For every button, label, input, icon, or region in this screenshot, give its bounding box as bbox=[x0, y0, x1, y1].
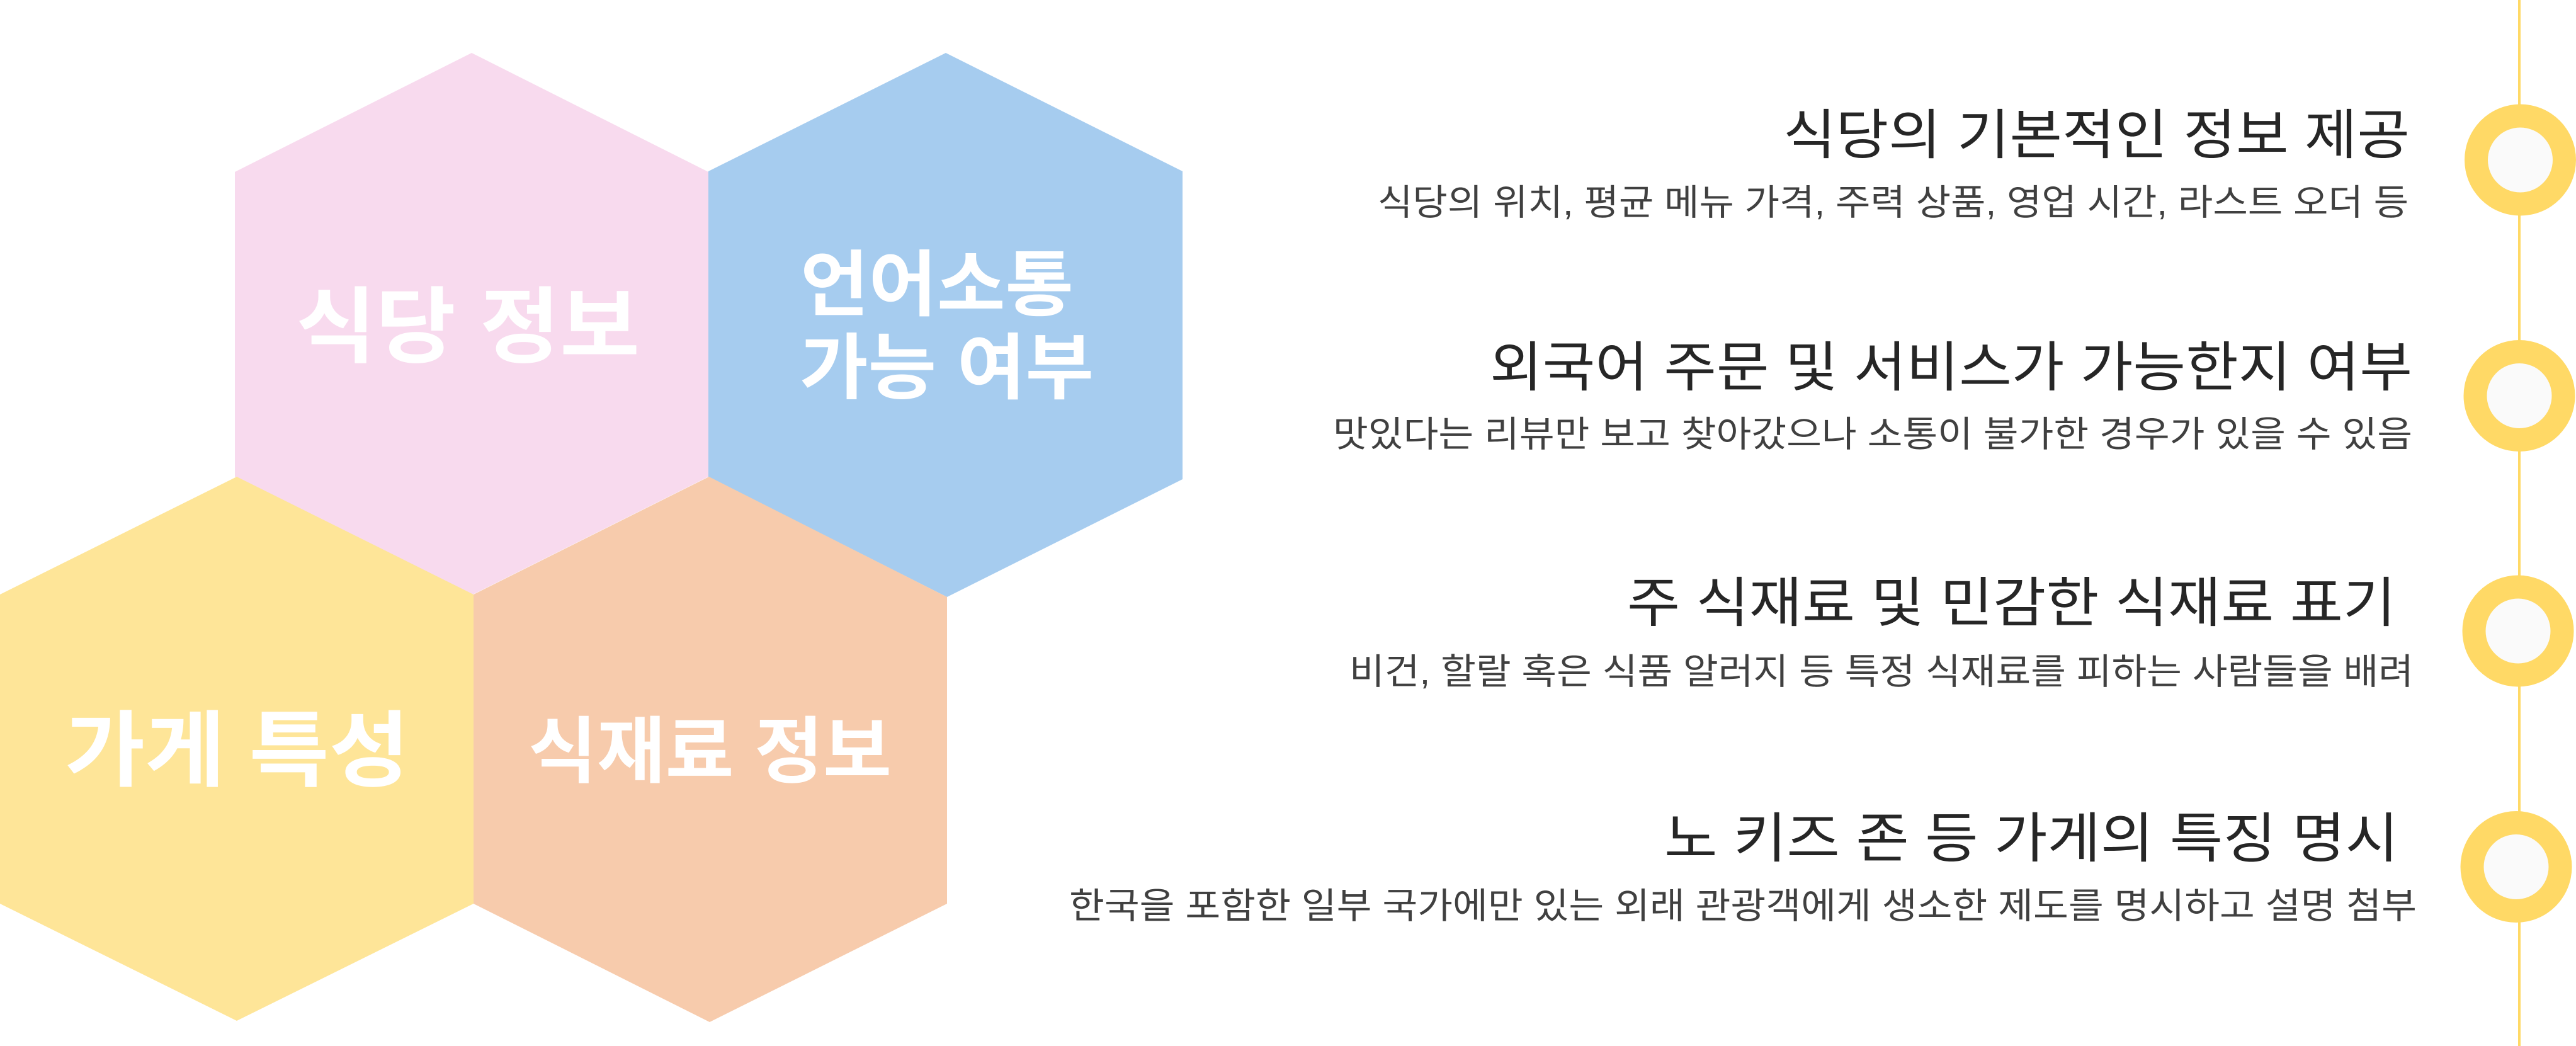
text block 4: 한국을 포함한 일부 국가에만 있는 외래 관광객에게 생소한 제도를 명시하고 설명 첨부 bbox=[1069, 886, 2417, 926]
hexagon: 언어소통 가능 여부 bbox=[708, 53, 1183, 597]
text block 1: 식당의 기본적인 정보 제공 bbox=[1783, 105, 2410, 166]
marker 1 bbox=[2465, 105, 2576, 215]
hexagon: 가게 특성 bbox=[0, 477, 474, 1021]
hexagon: 식재료 정보: 식재료 정보 bbox=[528, 712, 892, 792]
text block 4: 노 키즈 존 등 가게의 특징 명시 bbox=[1664, 809, 2398, 869]
text block 3: 비건, 할랄 혹은 식품 알러지 등 특정 식재료를 피하는 사람들을 배려 bbox=[1349, 652, 2414, 692]
hexagon: 식당 정보 bbox=[235, 53, 708, 594]
text block 1: 식당의 위치, 평균 메뉴 가격, 주력 상품, 영업 시간, 라스트 오더 등 bbox=[1378, 183, 2409, 223]
text block 2 bbox=[1333, 338, 2412, 455]
hexagon: 가게 특성: 가게 특성 bbox=[65, 705, 409, 797]
marker 3 bbox=[2462, 576, 2574, 686]
text block 3: 주 식재료 및 민감한 식재료 표기 bbox=[1627, 573, 2396, 634]
marker 4 bbox=[2461, 811, 2572, 923]
hexagon: 언어소통 가능 여부: 언어소통 bbox=[800, 246, 1074, 326]
hexagon: 식재료 정보 bbox=[474, 477, 947, 1022]
text block 2: 맛있다는 리뷰만 보고 찾아갔으나 소통이 불가한 경우가 있을 수 있음 bbox=[1333, 414, 2412, 455]
text block 4 bbox=[1069, 809, 2417, 926]
hexagon: 언어소통 가능 여부: 가능 여부 bbox=[800, 329, 1094, 409]
text block 3 bbox=[1349, 573, 2414, 692]
timeline vertical line bbox=[2518, 0, 2521, 1046]
text block 1 bbox=[1378, 105, 2410, 223]
text block 2: 외국어 주문 및 서비스가 가능한지 여부 bbox=[1490, 338, 2412, 398]
hexagon: 식당 정보: 식당 정보 bbox=[296, 281, 640, 373]
marker 2 bbox=[2463, 340, 2575, 452]
